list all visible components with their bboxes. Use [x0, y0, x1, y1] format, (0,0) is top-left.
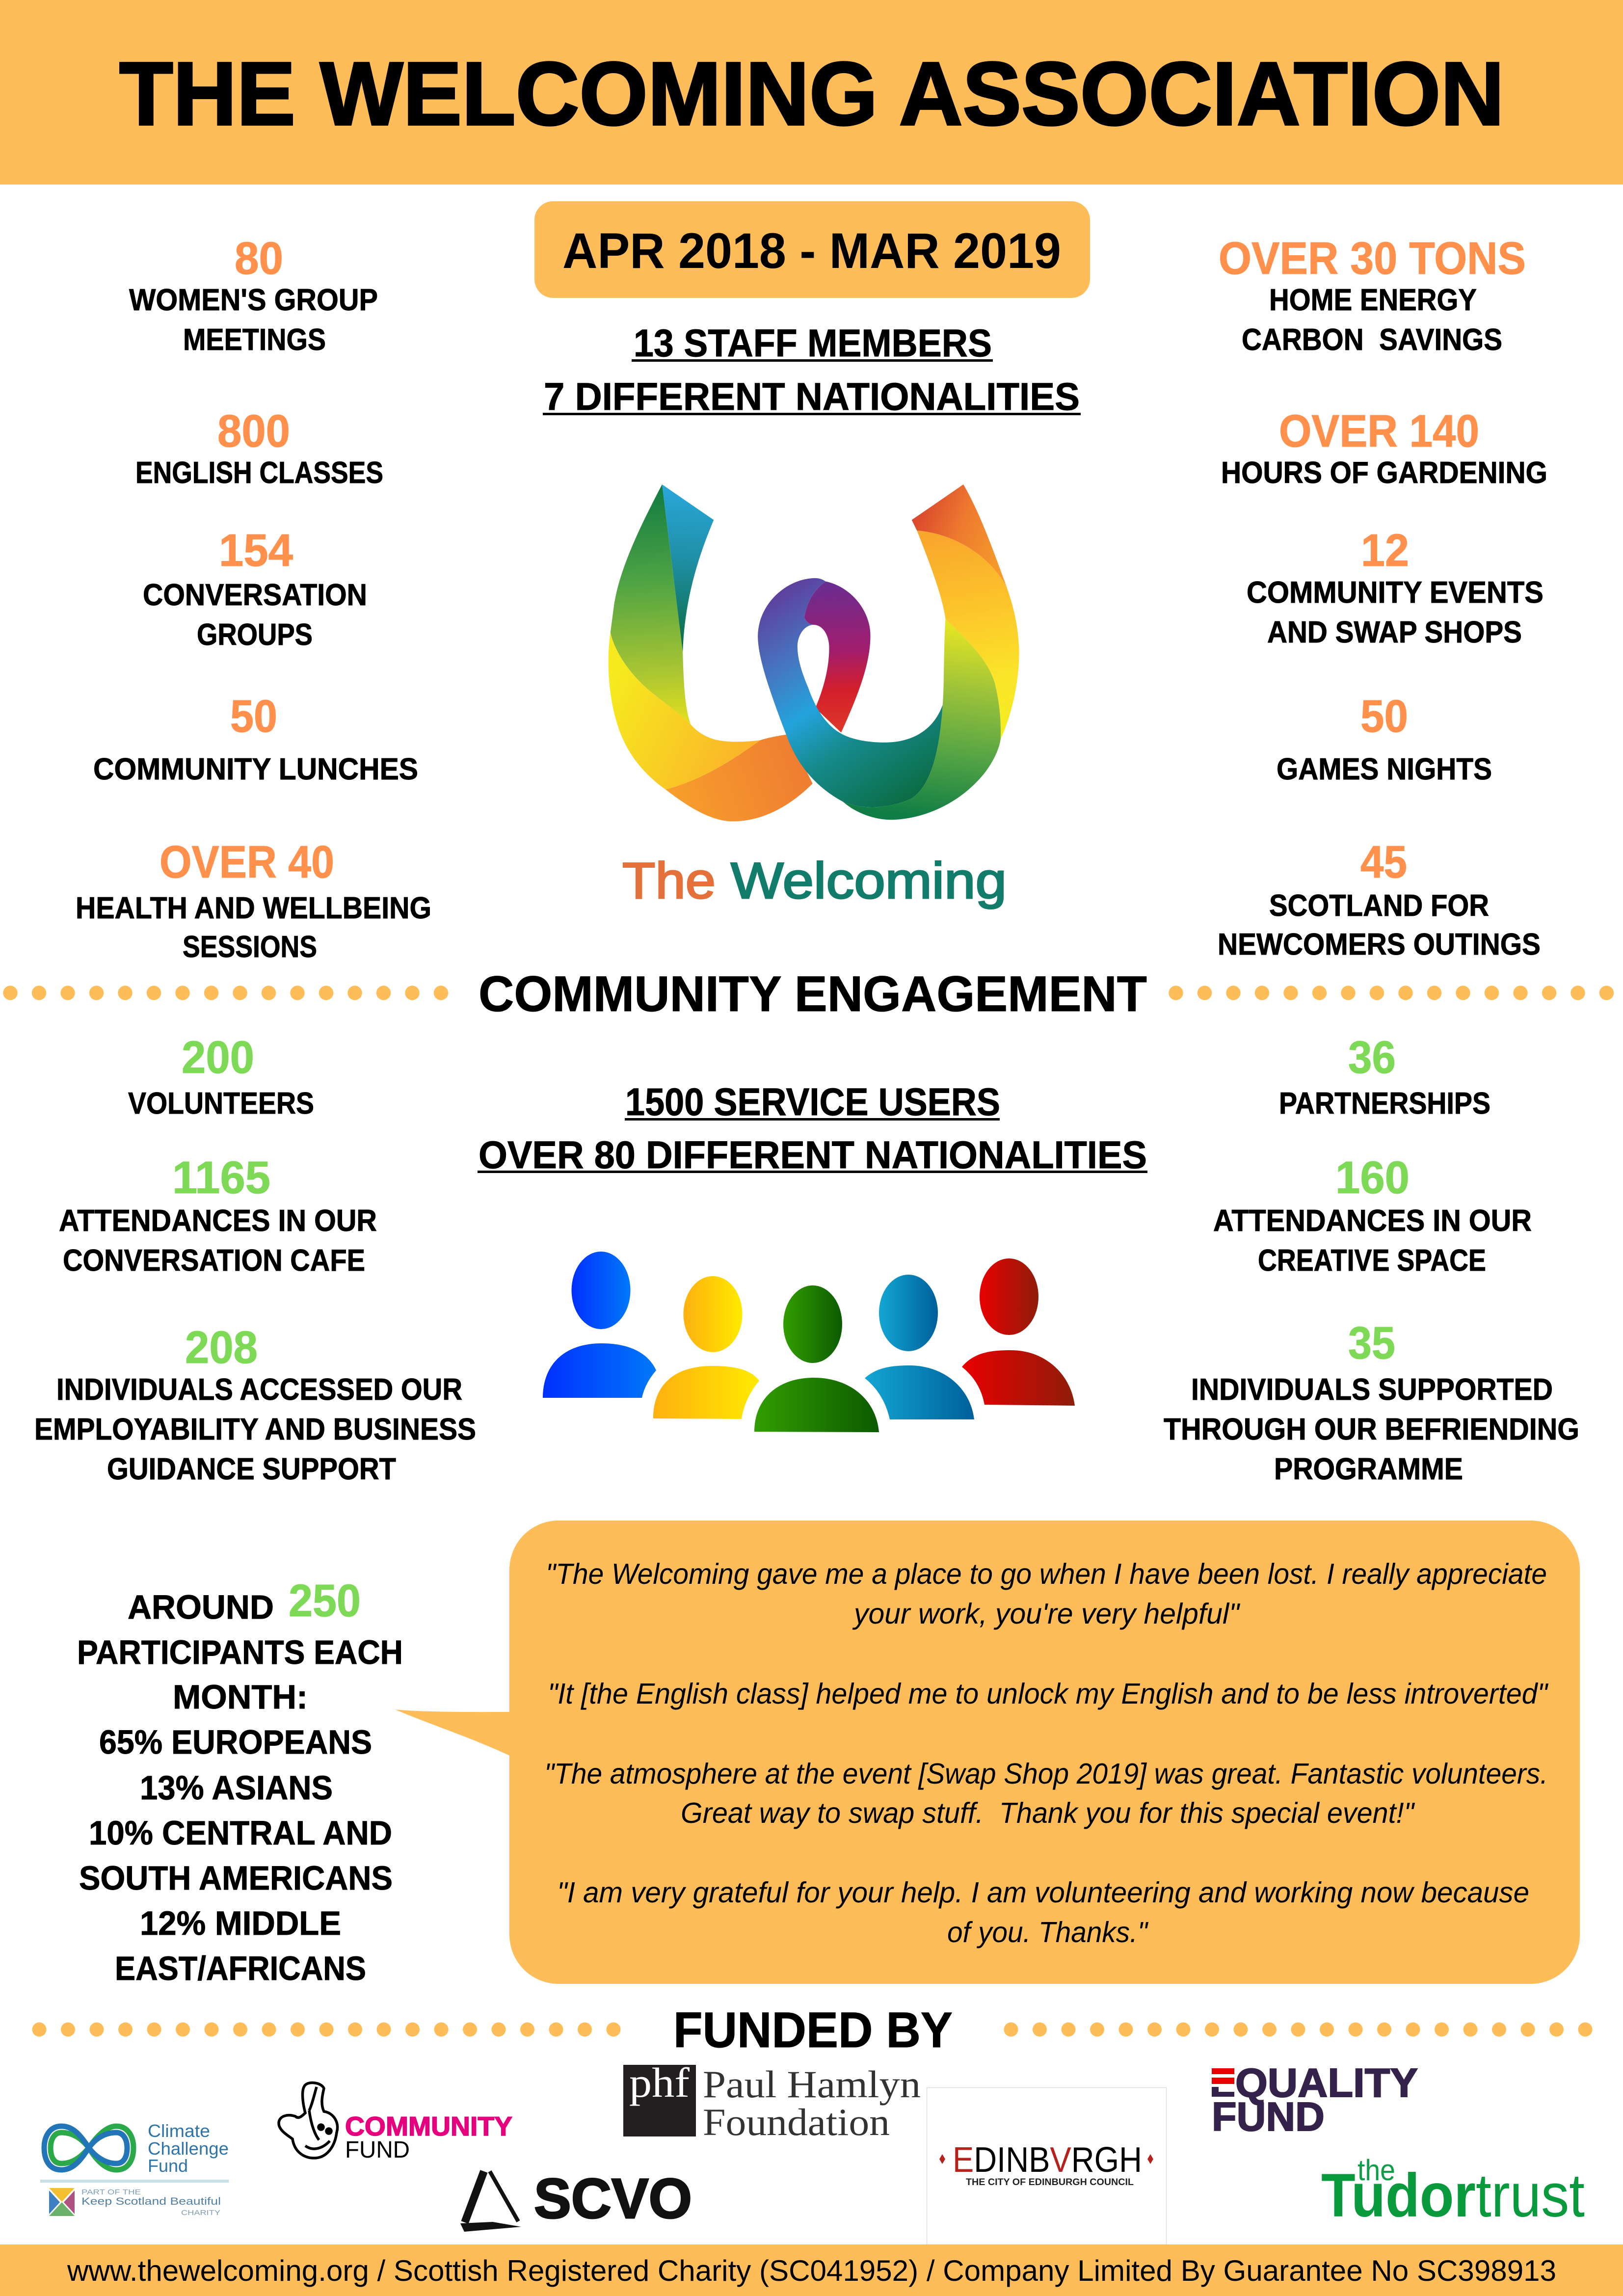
quote 4: "I am very grateful for your help. I am volunteering and working now because — [557, 1876, 1529, 1909]
stat: carbon savings — [1219, 233, 1526, 357]
quote 1: "The Welcoming gave me a place to go when I have been lost. I really appreciate — [546, 1558, 1547, 1590]
stat: english classes: 800 — [217, 405, 290, 456]
stat: befriending programme: INDIVIDUALS SUPPORTED — [1191, 1373, 1553, 1407]
person: red — [962, 1258, 1075, 1406]
text block: monthly participants: 13% ASIANS — [140, 1769, 333, 1807]
section heading: funded by: FUNDED BY — [673, 2002, 953, 2058]
divider: funded by dots left — [32, 2022, 620, 2037]
logo: Paul Hamlyn Foundation: Paul Hamlyn — [703, 2063, 921, 2106]
panel: activity stats left — [76, 233, 431, 964]
divider: community engagement dots right — [1169, 986, 1614, 1000]
stat: carbon savings: HOME ENERGY — [1269, 283, 1477, 317]
logo: SCVO — [460, 2167, 692, 2232]
logo: Equality Fund — [1212, 2060, 1418, 2139]
quote 4: of you. Thanks." — [947, 1916, 1149, 1949]
stat: community lunches: COMMUNITY LUNCHES — [93, 752, 418, 786]
icon: crossed fingers hand — [279, 2083, 338, 2158]
stat: partnerships — [1279, 1032, 1490, 1121]
logo: SCVO: SCVO — [534, 2167, 692, 2230]
logo: Paul Hamlyn Foundation: Foundation — [703, 2101, 890, 2143]
logo mark: ribbon W — [609, 484, 1019, 822]
stat: creative space: CREATIVE SPACE — [1258, 1244, 1486, 1278]
stat: community lunches — [93, 691, 418, 786]
quote 3: "The atmosphere at the event [Swap Shop 2019] was great. Fantastic volunteers. — [544, 1758, 1548, 1790]
stat: partnerships: 36 — [1348, 1032, 1396, 1083]
text block: monthly participants: 65% EUROPEANS — [99, 1723, 372, 1761]
stat: creative space: ATTENDANCES IN OUR — [1213, 1204, 1532, 1238]
panel: engagement stats right — [1164, 1032, 1579, 1486]
stat: games nights: 50 — [1360, 691, 1408, 742]
callout: testimonials speech bubble — [395, 1521, 1580, 1984]
logo: Equality Fund: QUALITY — [1235, 2060, 1418, 2106]
quote 3: Great way to swap stuff. Thank you for this special event!" — [681, 1797, 1415, 1829]
stat: befriending programme: PROGRAMME — [1274, 1452, 1463, 1486]
panel: engagement stats left — [34, 1032, 476, 1486]
logo: Climate Challenge Fund: Climate — [148, 2121, 210, 2141]
stat: newcomers outings: 45 — [1360, 836, 1407, 887]
stat: conversation cafe: 1165 — [172, 1152, 270, 1203]
divider: funded by dots right — [1004, 2022, 1592, 2037]
stat: volunteers: VOLUNTEERS — [128, 1087, 314, 1121]
logo: Community Fund — [279, 2083, 512, 2163]
text block: monthly participants: 10% CENTRAL AND — [89, 1814, 392, 1852]
stat: community events: 12 — [1361, 525, 1409, 576]
stat: conversation groups — [143, 525, 367, 652]
stat: volunteers: 200 — [182, 1032, 254, 1083]
stat: carbon savings: CARBON SAVINGS — [1242, 323, 1502, 357]
logo: Paul Hamlyn Foundation: phf — [629, 2059, 690, 2106]
stat: gardening: HOURS OF GARDENING — [1221, 456, 1547, 490]
footer band — [0, 2244, 1623, 2296]
stat: women's group meetings: MEETINGS — [183, 323, 326, 357]
footer band: www.thewelcoming.org / Scottish Registered Charity (SC041952) / Company Limited By Guarantee No SC398913 — [67, 2254, 1556, 2287]
stat: carbon savings: OVER 30 TONS — [1219, 233, 1526, 284]
stat: befriending programme: THROUGH OUR BEFRIENDING — [1164, 1413, 1579, 1446]
stat: conversation cafe: CONVERSATION CAFE — [63, 1244, 365, 1278]
text block: monthly participants: EAST/AFRICANS — [115, 1949, 366, 1987]
stat: conversation groups: GROUPS — [197, 618, 313, 652]
stat: newcomers outings: SCOTLAND FOR — [1269, 889, 1489, 923]
stat: games nights: GAMES NIGHTS — [1277, 752, 1492, 786]
stat: employability support: EMPLOYABILITY AND BUSINESS — [34, 1413, 476, 1446]
logo: The Welcoming — [609, 484, 1019, 909]
logo wordmark: Welcoming — [731, 853, 1007, 909]
stat: conversation cafe — [59, 1152, 377, 1278]
logo: Equality Fund: FUND — [1212, 2094, 1325, 2139]
staff and nationalities heading: 7 DIFFERENT NATIONALITIES — [544, 374, 1080, 418]
stat: women's group meetings: WOMEN'S GROUP — [129, 283, 378, 317]
section heading: community engagement: COMMUNITY ENGAGEMENT — [479, 966, 1147, 1022]
service users heading: 1500 SERVICE USERS — [625, 1080, 1000, 1123]
stat: women's group meetings — [129, 233, 378, 357]
logo: Paul Hamlyn Foundation — [623, 2059, 921, 2143]
stat: community lunches: 50 — [230, 691, 277, 742]
service users heading — [478, 1080, 1147, 1176]
stat: newcomers outings — [1218, 836, 1541, 961]
logo: Edinburgh council: THE CITY OF EDINBURGH COUNCIL — [966, 2177, 1134, 2188]
stat: community events: AND SWAP SHOPS — [1267, 615, 1522, 649]
logo: Community Fund: FUND — [345, 2137, 410, 2163]
stat: community events — [1247, 525, 1543, 649]
person: yellow — [653, 1276, 759, 1419]
stat: conversation groups: CONVERSATION — [143, 578, 367, 612]
title: THE WELCOMING ASSOCIATION — [119, 43, 1504, 144]
stat: games nights — [1277, 691, 1492, 786]
person: blue — [543, 1252, 656, 1398]
stat: creative space: 160 — [1335, 1152, 1410, 1203]
text block: monthly participants — [77, 1575, 403, 1987]
stat: english classes — [135, 405, 383, 490]
icon: infinity loop — [44, 2126, 133, 2170]
service users heading: OVER 80 DIFFERENT NATIONALITIES — [479, 1133, 1147, 1176]
quote 4 — [557, 1876, 1529, 1949]
logo: Climate Challenge Fund: CHARITY — [181, 2209, 220, 2217]
stat: health and wellbeing — [76, 836, 431, 964]
logo: Climate Challenge Fund: PART OF THE — [81, 2188, 141, 2196]
logo: Climate Challenge Fund: Challenge — [148, 2138, 229, 2159]
quote 1: your work, you're very helpful" — [852, 1598, 1241, 1630]
quote 2: "It [the English class] helped me to unlock my English and to be less introverted" — [548, 1678, 1549, 1710]
logo: Climate Challenge Fund: Fund — [148, 2156, 188, 2176]
logo: Community Fund: COMMUNITY — [345, 2111, 512, 2141]
stat: creative space — [1213, 1152, 1532, 1278]
stat: health and wellbeing: OVER 40 — [160, 836, 334, 887]
person: green — [754, 1285, 879, 1432]
stat: gardening: OVER 140 — [1279, 405, 1479, 456]
text block: monthly participants: SOUTH AMERICANS — [79, 1859, 393, 1897]
logo: Edinburgh council: EDINBVRGH — [953, 2140, 1142, 2180]
logo: Climate Challenge Fund: Keep Scotland Beautiful — [81, 2196, 221, 2207]
staff and nationalities heading: 13 STAFF MEMBERS — [634, 321, 992, 365]
stat: conversation cafe: ATTENDANCES IN OUR — [59, 1204, 377, 1238]
stat: gardening — [1221, 405, 1547, 490]
logo: Tudor Trust: the — [1357, 2154, 1395, 2187]
quote 3 — [544, 1758, 1548, 1829]
stat: conversation groups: 154 — [219, 525, 293, 576]
logo wordmark: The — [622, 853, 716, 909]
icon: sail triangle — [460, 2171, 521, 2232]
divider: community engagement dots left — [3, 986, 448, 1000]
icon: group of five people — [543, 1252, 1075, 1432]
text block: monthly participants: AROUND — [128, 1588, 274, 1626]
stat: volunteers — [128, 1032, 314, 1121]
icon: keep scotland beautiful — [49, 2188, 75, 2216]
staff and nationalities heading — [543, 321, 1081, 418]
date pill — [534, 201, 1090, 298]
date pill: APR 2018 - MAR 2019 — [562, 223, 1061, 279]
logo: Climate Challenge Fund — [40, 2121, 229, 2217]
logo: Tudor Trust: Tudortrust — [1321, 2162, 1585, 2230]
stat: women's group meetings: 80 — [235, 233, 283, 284]
text block: monthly participants: 12% MIDDLE — [140, 1904, 341, 1942]
stat: employability support: 208 — [185, 1322, 258, 1373]
stat: english classes: ENGLISH CLASSES — [135, 456, 383, 490]
text block: monthly participants: MONTH: — [173, 1678, 308, 1716]
quote 1 — [546, 1558, 1547, 1630]
text block: monthly participants: 250 — [289, 1575, 361, 1626]
stat: partnerships: PARTNERSHIPS — [1279, 1087, 1490, 1121]
person: light blue — [865, 1275, 974, 1419]
stat: employability support — [34, 1322, 476, 1486]
stat: newcomers outings: NEWCOMERS OUTINGS — [1218, 928, 1541, 961]
text block: monthly participants: PARTICIPANTS EACH — [77, 1633, 403, 1671]
stat: health and wellbeing: SESSIONS — [183, 930, 317, 964]
stat: community events: COMMUNITY EVENTS — [1247, 576, 1543, 610]
stat: employability support: INDIVIDUALS ACCESSED OUR — [56, 1373, 462, 1407]
stat: befriending programme: 35 — [1348, 1317, 1395, 1368]
stat: health and wellbeing: HEALTH AND WELLBEING — [76, 891, 431, 925]
stat: befriending programme — [1164, 1317, 1579, 1486]
header banner — [0, 0, 1623, 185]
stat: employability support: GUIDANCE SUPPORT — [107, 1452, 396, 1486]
panel: activity stats right — [1218, 233, 1547, 961]
logo: Edinburgh council — [927, 2088, 1166, 2245]
